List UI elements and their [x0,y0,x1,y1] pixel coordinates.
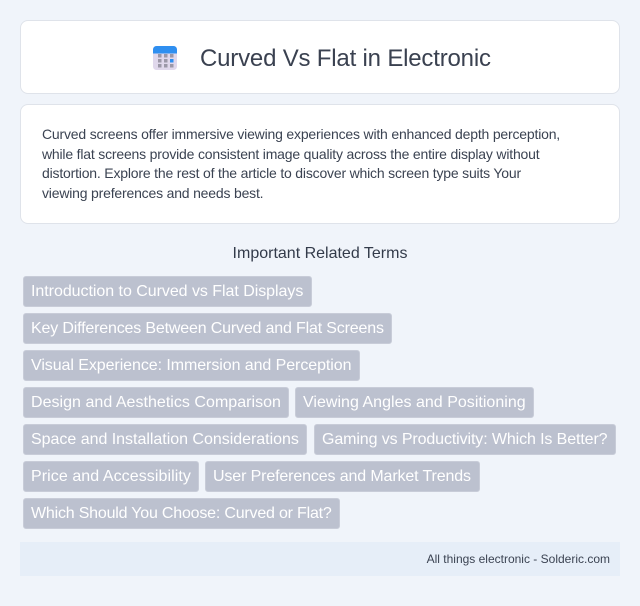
tag: Design and Aesthetics Comparison [31,394,281,411]
title card [20,20,620,94]
tag: Introduction to Curved vs Flat Displays [31,283,303,300]
tag [295,387,534,418]
intro paragraph [42,126,560,201]
intro paragraph: Curved screens offer immersive viewing experiences with enhanced depth perception, [42,126,560,142]
footer credit: All things electronic - Solderic.com [427,552,610,566]
tag [23,313,392,344]
tag [23,387,289,418]
intro paragraph: distortion. Explore the rest of the article to discover which screen type suits Your [42,165,521,181]
tag [23,424,307,455]
tag: Gaming vs Productivity: Which Is Better? [322,431,607,448]
tag: User Preferences and Market Trends [213,468,471,485]
intro paragraph: while flat screens provide consistent image quality across the entire display without [42,146,539,162]
tag: Visual Experience: Immersion and Perception [31,357,351,374]
tag [23,276,312,307]
icon: calendar [153,46,177,70]
tag [23,498,340,529]
tag [314,424,616,455]
intro text card [20,104,620,224]
related term tags [23,276,616,529]
tag [205,461,480,492]
tag [23,350,360,381]
footer bar [20,542,620,576]
section heading: Important Related Terms [233,245,407,262]
tag: Key Differences Between Curved and Flat Screens [31,320,384,337]
tag: Which Should You Choose: Curved or Flat? [31,505,332,522]
tag: Space and Installation Considerations [31,431,299,448]
title: Curved Vs Flat in Electronic [200,45,491,72]
tag: Viewing Angles and Positioning [303,394,526,411]
tag: Price and Accessibility [31,468,191,485]
tag [23,461,199,492]
intro paragraph: viewing preferences and needs best. [42,184,263,200]
